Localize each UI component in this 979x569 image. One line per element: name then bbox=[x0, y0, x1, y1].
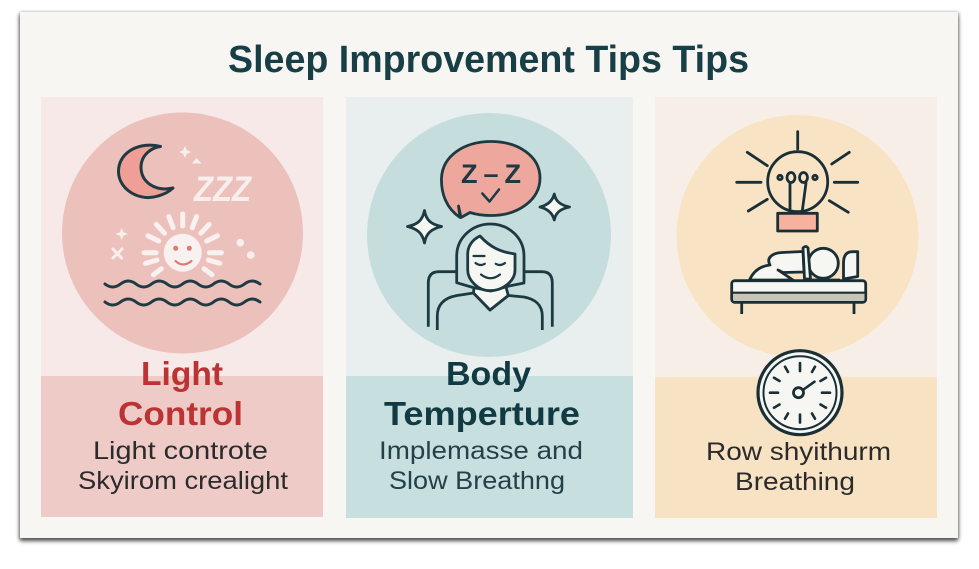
circle: light control bbox=[62, 112, 303, 354]
icon: waves bbox=[105, 281, 260, 305]
heading: light control: Light bbox=[141, 355, 223, 392]
circle: breathing rhythm bbox=[676, 115, 918, 357]
heading: light control: Control bbox=[118, 395, 243, 432]
icon: smiling sun bbox=[144, 214, 221, 275]
panel: body temperature bbox=[346, 97, 633, 518]
icon: clock bbox=[758, 351, 842, 435]
text: breathing description: Row shyithurm bbox=[706, 438, 891, 466]
panel: breathing rhythm bbox=[655, 97, 937, 518]
circle: body temperature bbox=[367, 113, 611, 357]
icon: sparkles around sun bbox=[113, 228, 254, 259]
icon: speech bubble with sleeping z: Z – Z bbox=[461, 159, 521, 189]
text: breathing description bbox=[706, 438, 891, 496]
heading: body temperature bbox=[384, 355, 580, 432]
text: body temperature description bbox=[379, 437, 583, 495]
icon: resting person bbox=[437, 224, 542, 330]
icon: speech bubble with sleeping z bbox=[441, 142, 540, 218]
icon: small stars near moon bbox=[179, 146, 202, 164]
panel: light control bbox=[41, 97, 323, 517]
icon: crescent moon bbox=[118, 145, 173, 198]
text: light control description: Skyirom crealight bbox=[78, 467, 288, 495]
heading: body temperature: Temperture bbox=[384, 395, 580, 432]
heading: body temperature: Body bbox=[446, 355, 532, 392]
text: light control description: Light controte bbox=[93, 437, 268, 465]
icon: sparkles bbox=[408, 194, 570, 243]
text: body temperature description: Slow Breathng bbox=[389, 467, 565, 495]
icon: light bulb bbox=[737, 132, 858, 231]
heading: light control bbox=[118, 355, 243, 432]
icon: chair bbox=[428, 272, 552, 327]
text: light control description bbox=[78, 437, 288, 495]
text: breathing description: Breathing bbox=[735, 468, 855, 496]
icon: person sleeping in bed bbox=[732, 246, 866, 314]
zzz mark: ZZZ bbox=[193, 170, 252, 209]
text: body temperature description: Implemasse and bbox=[379, 437, 583, 465]
title: Sleep Improvement Tips Tips bbox=[228, 39, 749, 81]
